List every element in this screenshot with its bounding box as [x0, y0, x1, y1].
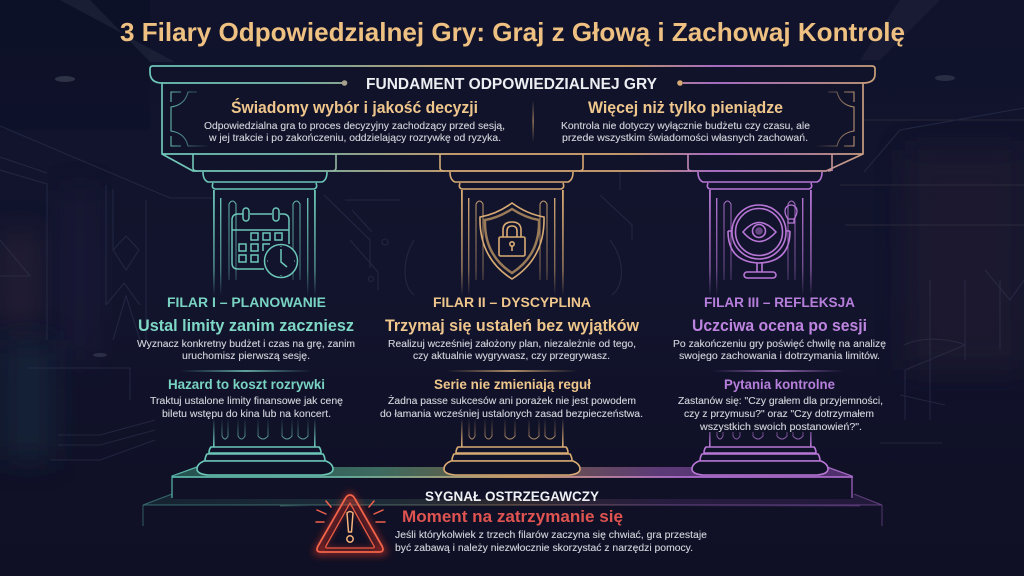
- text block: plan: Realizuj wcześniej założony plan, niezależnie od tego,: [388, 338, 636, 350]
- icon: warning triangle: [316, 495, 385, 552]
- text block: ticket analogy: Traktuj ustalone limity finansowe jak cenę: [150, 395, 343, 407]
- text block: conscious choice: Odpowiedzialna gra to proces decyzyjny zachodzący przed sesją,: [204, 120, 505, 132]
- text block: analysis: Po zakończeniu gry poświęć chwilę na analizę: [673, 338, 886, 350]
- text block: ticket analogy: biletu wstępu do kina lub na koncert.: [162, 408, 331, 420]
- heading: warning signal: SYGNAŁ OSTRZEGAWCZY: [425, 488, 600, 504]
- text block: conscious choice: Świadomy wybór i jakość decyzji: [231, 98, 478, 117]
- icon: shield with padlock: [480, 203, 544, 279]
- entablature panel: foundation frame: [150, 66, 875, 171]
- subheading: streaks: Serie nie zmieniają reguł: [434, 376, 591, 392]
- subheading: set limits: Ustal limity zanim zaczniesz: [138, 317, 354, 335]
- icon: mirror with eye and light bulb: [728, 205, 797, 278]
- text block: warning description: Jeśli którykolwiek z trzech filarów zaczyna się chwiać, gra przestaje: [395, 529, 707, 541]
- text block: budget: uruchomisz pierwszą sesję.: [182, 350, 310, 362]
- panel: pillar III text: [673, 295, 886, 433]
- text block: streaks explanation: [380, 394, 643, 420]
- text block: conscious choice: w jej trakcie i po zakończeniu, oddzielający rozrywkę od ryzyka.: [208, 132, 501, 144]
- subheading: control questions: Pytania kontrolne: [724, 376, 835, 392]
- text block: streaks explanation: Żadna passe sukcesów ani porażek nie jest powodem: [388, 394, 636, 407]
- text block: plan: czy aktualnie wygrywasz, czy przegrywasz.: [413, 350, 610, 362]
- pillar I: [193, 154, 336, 475]
- subheading: stick to rules: Trzymaj się ustaleń bez wyjątków: [385, 317, 639, 335]
- heading: Filar III: FILAR III – REFLEKSJA: [704, 295, 855, 310]
- callout: warning signal: [316, 488, 707, 554]
- text block: analysis: [673, 338, 886, 362]
- text block: conscious choice: [204, 98, 505, 144]
- pillar II: [440, 154, 583, 475]
- text block: budget: Wyznacz konkretny budżet i czas na grę, zanim: [137, 338, 355, 350]
- text block: budget: [137, 338, 355, 362]
- subheading: honest assessment: Uczciwa ocena po sesji: [692, 317, 867, 335]
- text block: more than money: Więcej niż tylko pieniądze: [588, 99, 783, 117]
- panel: pillar I text: [137, 295, 355, 420]
- heading: Filar I: FILAR I – PLANOWANIE: [167, 295, 326, 310]
- text block: analysis: swojego zachowania i dotrzymania limitów.: [679, 350, 880, 362]
- subheading: cost of entertainment: Hazard to koszt rozrywki: [168, 376, 325, 392]
- subheading: moment to stop: Moment na zatrzymanie się: [402, 507, 623, 526]
- text block: warning description: być zabawą i należy niezwłocznie skorzystać z narzędzi pomocy.: [395, 542, 693, 554]
- heading: Filar II: FILAR II – DYSCYPLINA: [433, 295, 591, 310]
- text block: questions: czy z przymusu?" oraz "Czy dotrzymałem: [684, 408, 874, 420]
- heading: foundation: FUNDAMENT ODPOWIEDZIALNEJ GRY: [366, 76, 658, 93]
- text block: streaks explanation: do łamania wcześniej ustalonych zasad bezpieczeństwa.: [380, 408, 643, 420]
- text block: questions: Zastanów się: "Czy grałem dla przyjemności,: [678, 395, 883, 407]
- title: 3 Filary Odpowiedzialnej Gry: Graj z Głową i Zachowaj Kontrolę: [120, 17, 905, 47]
- pillar III: [688, 154, 832, 475]
- text block: ticket analogy: [150, 395, 343, 420]
- text block: questions: wszystkich swoich postanowień?".: [699, 421, 862, 433]
- text block: more than money: Kontrola nie dotyczy wyłącznie budżetu czy czasu, ale: [561, 120, 810, 132]
- text block: more than money: [561, 99, 810, 144]
- text block: plan: [388, 338, 636, 362]
- icon: calendar and clock: [232, 208, 298, 278]
- text block: warning description: [395, 529, 707, 554]
- stepped base platform: [143, 467, 882, 526]
- panel: pillar II text: [380, 295, 643, 420]
- text block: more than money: przede wszystkim świadomości własnych zachowań.: [562, 132, 808, 144]
- text block: questions: [678, 395, 883, 433]
